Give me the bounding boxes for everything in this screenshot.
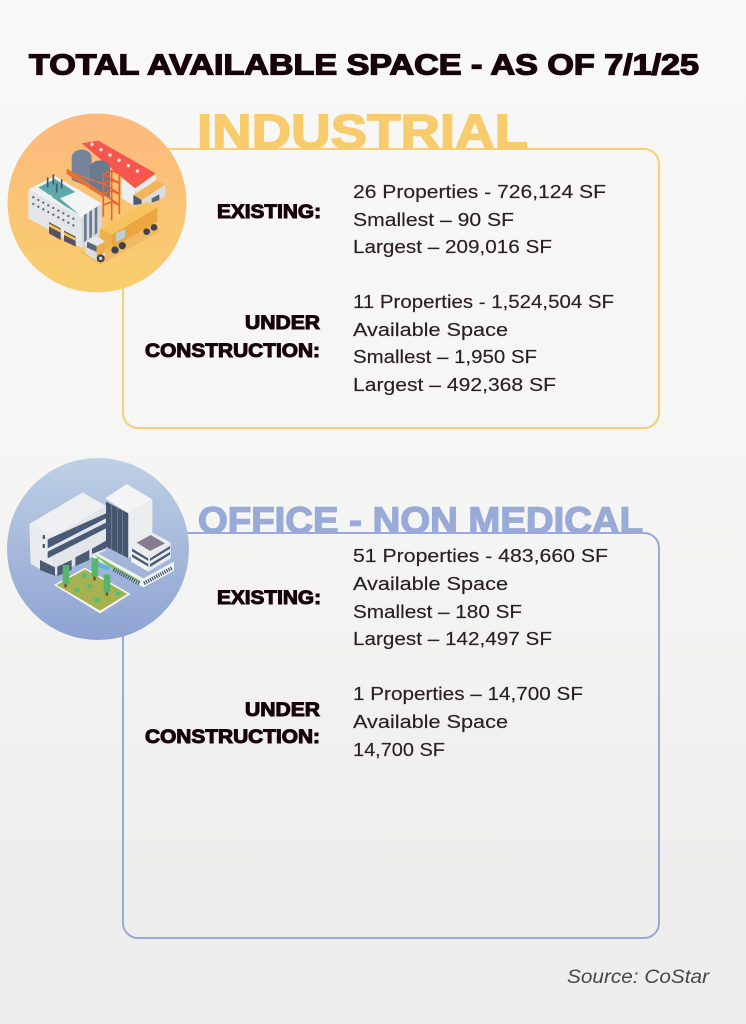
label: existing: EXISTING: [217,588,321,609]
text: under construction figures: Largest – 492,368 SF [353,374,556,395]
panel: office [7,458,659,938]
text: existing figures: Largest – 209,016 SF [353,236,552,257]
panel: industrial [8,105,659,428]
text: under construction figures: 11 Properties - 1,524,504 SF [353,291,614,312]
title: TOTAL AVAILABLE SPACE - AS OF 7/1/25 [29,50,699,82]
icon: office complex [7,458,189,640]
source note: Source: CoStar [567,967,710,988]
text: under construction figures [353,683,583,760]
text: under construction figures [353,291,614,395]
label: under construction: UNDER [245,700,320,721]
text: existing figures [353,181,606,257]
text: existing figures: Smallest – 90 SF [353,209,514,230]
text: existing figures: Available Space [353,573,508,594]
text: existing figures: 51 Properties - 483,660 SF [353,545,608,566]
text: under construction figures: 14,700 SF [353,739,445,760]
label: under construction [145,700,320,748]
panel outline: office [123,533,659,938]
text: under construction figures: Smallest – 1,950 SF [353,346,537,367]
text: under construction figures: Available Space [353,319,508,340]
text: existing figures: Smallest – 180 SF [353,601,522,622]
text: under construction figures: 1 Properties – 14,700 SF [353,683,583,704]
text: under construction figures: Available Space [353,711,508,732]
label: under construction: UNDER [245,313,320,334]
label: under construction [145,313,320,362]
label: under construction: CONSTRUCTION: [145,341,320,362]
text: existing figures: Largest – 142,497 SF [353,628,552,649]
heading: office non medical: OFFICE - NON MEDICAL [198,499,643,541]
panel outline: industrial [123,149,659,428]
label: existing: EXISTING: [217,202,321,223]
text: existing figures: 26 Properties - 726,124 SF [353,181,606,202]
heading: industrial: INDUSTRIAL [197,105,528,159]
text: existing figures [353,545,608,649]
label: under construction: CONSTRUCTION: [145,727,320,748]
icon: industrial complex [8,114,186,292]
